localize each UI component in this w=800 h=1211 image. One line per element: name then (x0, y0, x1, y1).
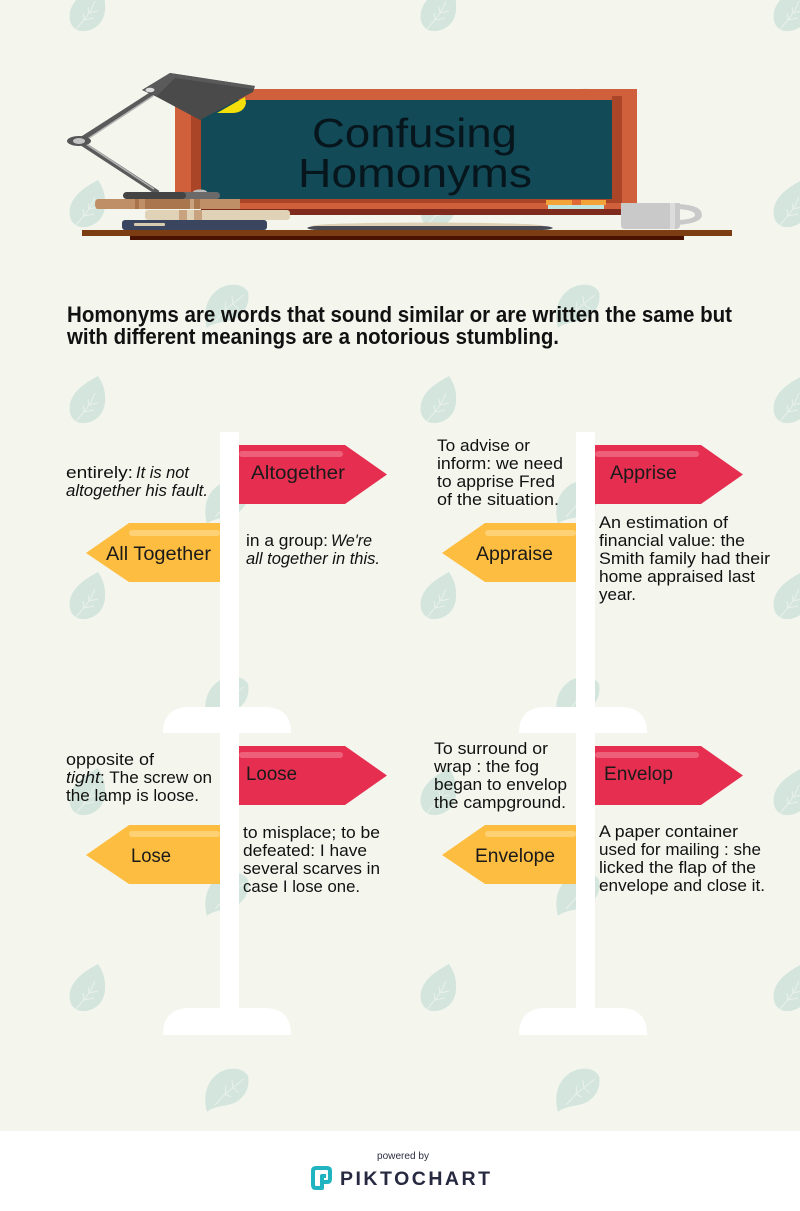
icon: Piktochart logo (313, 1168, 330, 1188)
definition: envelope (599, 822, 765, 895)
arrow: Appraise (442, 523, 576, 582)
post and base (163, 432, 291, 733)
definition: lose: defeated: I have (243, 841, 367, 860)
book stack (95, 199, 290, 230)
post and base (519, 733, 647, 1035)
intro text: with different meanings are a notorious stumbling. (66, 324, 559, 349)
definition: envelop: the campground. (434, 793, 566, 812)
definition: altogether: entirely: (66, 463, 133, 482)
arrow: Envelop (595, 746, 743, 805)
chalkboard surface (201, 100, 612, 199)
title (298, 110, 532, 196)
definition: altogether (66, 463, 208, 500)
definition: appraise: year. (599, 585, 636, 604)
signpost: Loose / Lose (66, 733, 387, 1035)
definition: appraise: Smith family had their (599, 549, 770, 568)
definition: envelop: To surround or (434, 739, 548, 758)
definition: apprise: of the situation. (437, 490, 559, 509)
definition: loose: : The screw on (100, 768, 212, 787)
definition: envelop (433, 739, 567, 812)
signpost: Altogether / All Together (66, 432, 387, 733)
definition: apprise: to apprise Fred (437, 472, 555, 491)
tablet on desk (307, 222, 553, 230)
definition: appraise: An estimation of (599, 513, 728, 532)
definition: apprise (437, 436, 563, 509)
definition: apprise: To advise or (437, 436, 530, 455)
definition: apprise: inform: we need (437, 454, 563, 473)
arrow: Lose: Lose (131, 846, 171, 867)
definition: loose: tight (66, 768, 101, 787)
definition: lose: to misplace; to be (243, 823, 380, 842)
arrow: Envelope: Envelope (475, 846, 555, 867)
definition: lose: several scarves in (243, 859, 380, 878)
definition: envelop: wrap : the fog (433, 757, 539, 776)
icon: mug (621, 203, 702, 229)
post and base (163, 733, 291, 1035)
definition: all together: all together in this. (246, 549, 380, 568)
arrow: Altogether: Altogether (251, 463, 346, 484)
chalk tray (546, 200, 606, 209)
definition: loose: opposite of (66, 750, 154, 769)
signpost: Apprise / Appraise (437, 432, 770, 733)
arrow: Loose (239, 746, 387, 805)
title: Homonyms (298, 150, 532, 196)
definition: appraise: financial value: the (599, 531, 745, 550)
arrow: Envelope (442, 825, 576, 884)
definition: envelope: licked the flap of the (599, 858, 756, 877)
footer (0, 1131, 800, 1211)
definition: all together (246, 531, 380, 568)
arrow: Lose (86, 825, 220, 884)
definition: all together: in a group: (246, 531, 328, 550)
definition: appraise: home appraised last (599, 567, 755, 586)
definition: envelope: used for mailing : she (599, 840, 761, 859)
Piktochart wordmark: PIKTOCHART (340, 1168, 490, 1190)
definition: lose (243, 823, 380, 896)
arrow: Apprise: Apprise (610, 463, 677, 484)
chalkboard frame (175, 89, 637, 215)
arrow: Appraise: Appraise (476, 544, 553, 565)
definition: lose: case I lose one. (243, 877, 360, 896)
definition: envelop: began to envelop (434, 775, 567, 794)
arrow: All Together: All Together (106, 544, 212, 565)
definition: altogether: It is not (136, 463, 190, 482)
arrow: Apprise (595, 445, 743, 504)
definition: all together: We're (331, 531, 372, 550)
definition: appraise (599, 513, 770, 604)
title: Confusing (312, 110, 517, 156)
arrow: Envelop: Envelop (604, 764, 673, 785)
arrow: All Together (86, 523, 220, 582)
definition: envelope: A paper container (599, 822, 738, 841)
powered by: powered by (377, 1151, 429, 1162)
desk (82, 230, 732, 240)
signpost: Envelop / Envelope (433, 733, 765, 1035)
definition: loose: the lamp is loose. (66, 786, 199, 805)
intro text: Homonyms are words that sound similar or are written the same but (67, 302, 733, 327)
definition: envelope: envelope and close it. (599, 876, 765, 895)
definition: loose (66, 750, 212, 805)
arrow: Altogether (239, 445, 387, 504)
definition: altogether: altogether his fault. (66, 481, 208, 500)
illustration: desk with chalkboard (67, 73, 732, 240)
arrow: Loose: Loose (246, 764, 297, 785)
intro text (66, 302, 733, 349)
icon: desk lamp (67, 73, 255, 199)
post and base (519, 432, 647, 733)
